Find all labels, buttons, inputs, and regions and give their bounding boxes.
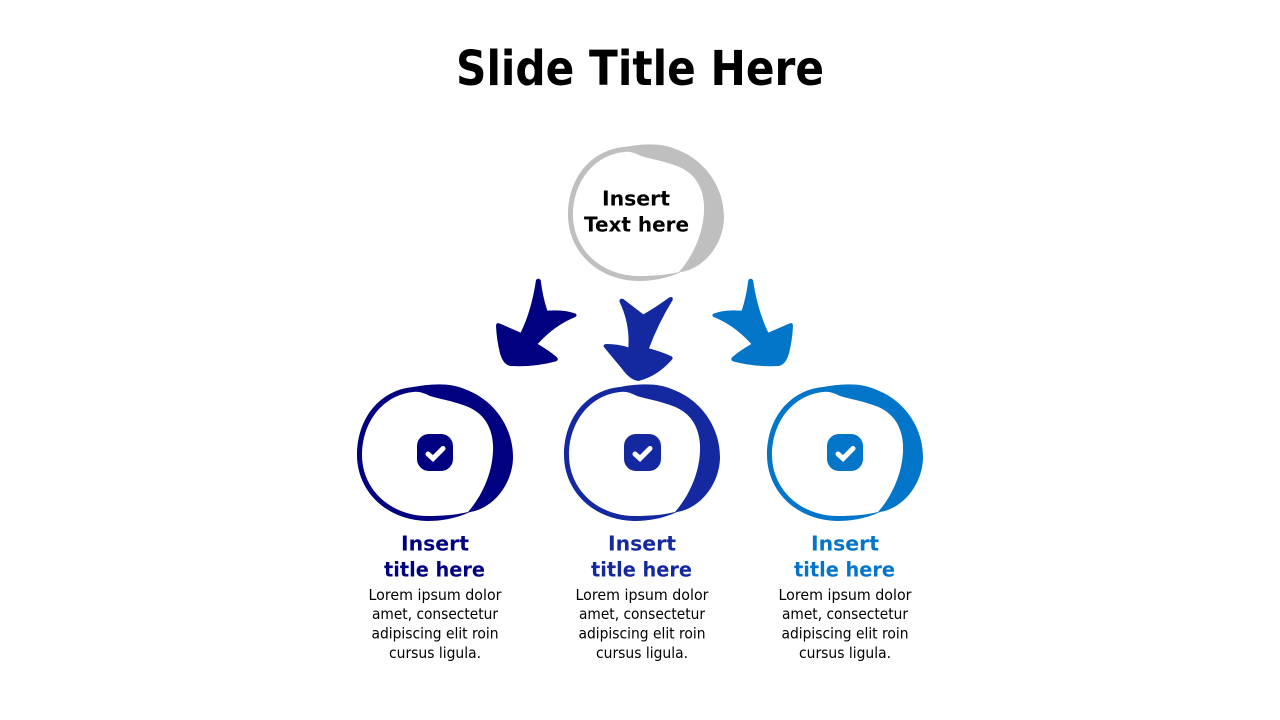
heading: Insert [811, 532, 879, 556]
body text: adipiscing elit roin [782, 624, 908, 642]
ring with check icon [767, 384, 923, 521]
body text: Lorem ipsum dolor [576, 586, 709, 604]
top circle: Insert Text here: Insert [602, 186, 670, 210]
top circle: Insert Text here [568, 144, 724, 281]
arrow: right [712, 279, 793, 366]
body text: cursus ligula. [389, 644, 481, 662]
body text: adipiscing elit roin [578, 624, 706, 642]
body text [368, 586, 502, 662]
body text [576, 586, 709, 662]
heading: Insert [401, 532, 469, 556]
panel: middle item [564, 384, 720, 662]
heading: title here [591, 558, 692, 582]
panel: left item [357, 384, 513, 662]
ring with check icon [564, 384, 720, 521]
body text: cursus ligula. [799, 644, 891, 662]
body text: adipiscing elit roin [372, 624, 498, 642]
body text: Lorem ipsum dolor [778, 586, 912, 604]
body text: amet, consectetur [579, 605, 706, 623]
body text: amet, consectetur [782, 605, 909, 623]
body text: amet, consectetur [372, 605, 499, 623]
heading: title here [384, 558, 485, 582]
body text: cursus ligula. [596, 644, 688, 662]
heading: Insert [608, 532, 676, 556]
title: Slide Title Here [456, 41, 824, 97]
heading [384, 532, 485, 582]
arrow: left [496, 279, 577, 366]
heading [591, 532, 692, 582]
heading: title here [794, 558, 895, 582]
arrow: middle [604, 297, 673, 381]
body text [778, 586, 912, 662]
ring with check icon [357, 384, 513, 521]
top circle: Insert Text here: Text here [584, 212, 689, 236]
body text: Lorem ipsum dolor [368, 586, 502, 604]
panel: right item [767, 384, 923, 662]
heading [794, 532, 895, 582]
